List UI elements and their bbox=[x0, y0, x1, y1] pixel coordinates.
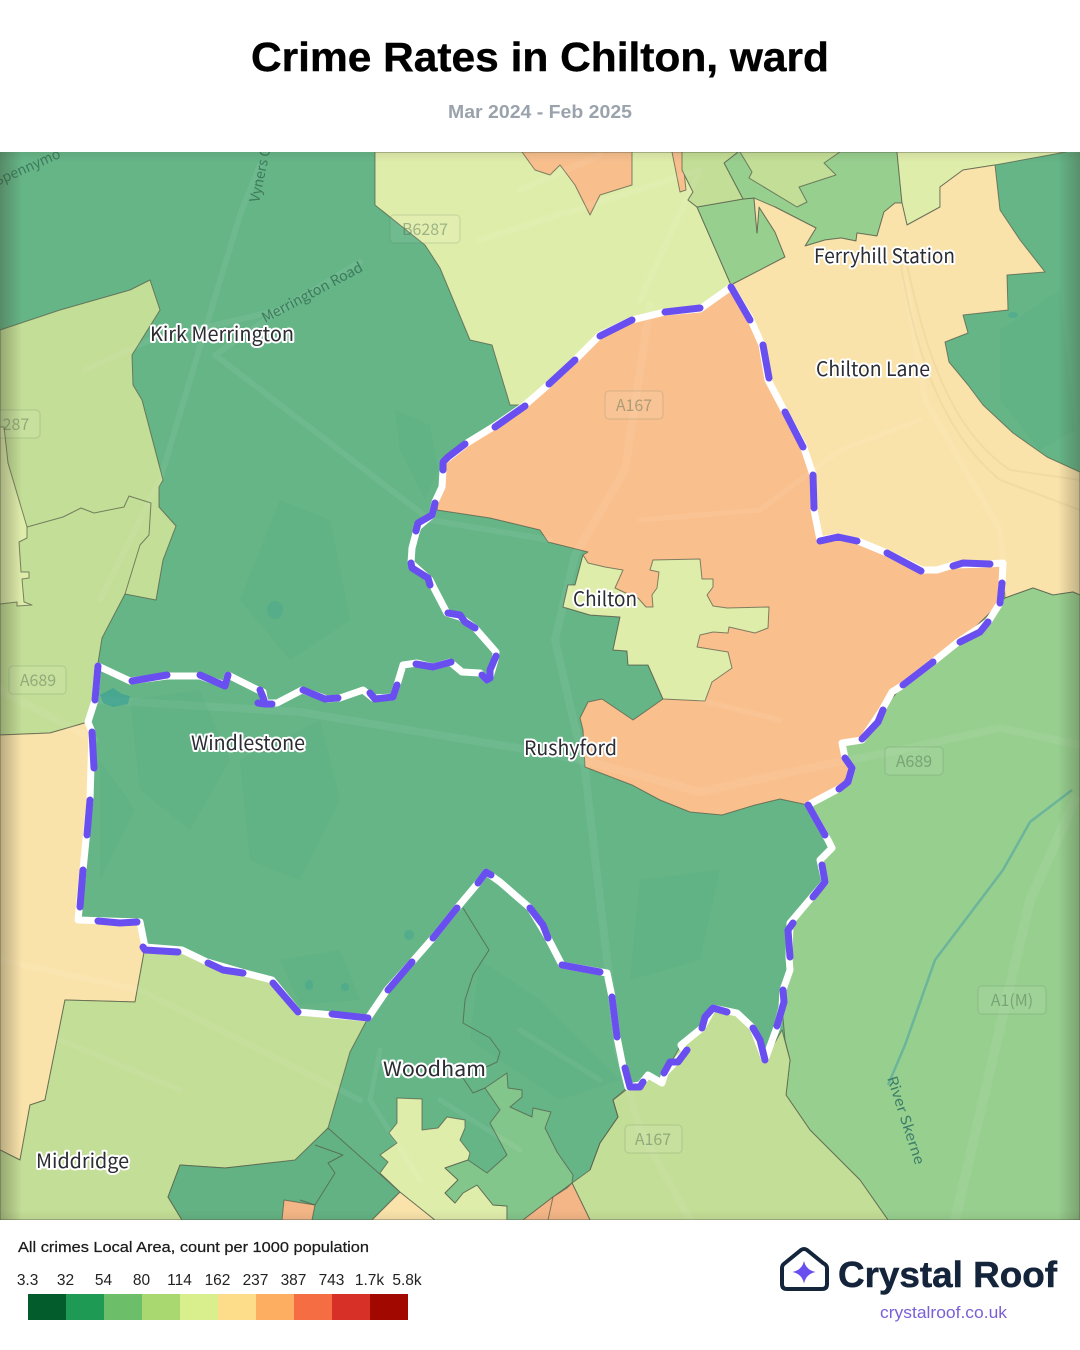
road label: B6287 bbox=[390, 215, 460, 243]
legend scale labels: 54 bbox=[95, 1272, 112, 1289]
region: Ferryhill yellow bbox=[731, 165, 1080, 598]
region: west light green bbox=[0, 280, 176, 735]
legend title: All crimes Local Area, count per 1000 population bbox=[18, 1239, 369, 1256]
region: far west strip bbox=[0, 427, 32, 606]
region: Woodham south yellow bbox=[372, 1192, 435, 1220]
logo: wordmark: Crystal Roof bbox=[838, 1254, 1058, 1295]
road label: A1(M) bbox=[978, 986, 1046, 1014]
place label: Kirk Merrington: Kirk Merrington bbox=[150, 318, 294, 347]
road label: A167 south: A167 bbox=[635, 1126, 671, 1150]
legend scale labels: 237 bbox=[243, 1272, 268, 1289]
road label: A689 east: A689 bbox=[896, 748, 932, 772]
region: north light band bbox=[375, 152, 731, 405]
street label: Merrington Road: Merrington Road bbox=[258, 257, 366, 327]
legend scale labels: 80 bbox=[133, 1272, 150, 1289]
region: Chilton orange bbox=[437, 285, 1003, 815]
place label: Middridge: Middridge bbox=[36, 1145, 129, 1174]
region: Chilton village pale bbox=[563, 555, 769, 701]
road label: B6287 clipped west: 287 bbox=[3, 411, 29, 435]
place label: Woodham: Woodham bbox=[383, 1053, 486, 1082]
legend scale labels: 3.3 bbox=[17, 1272, 38, 1289]
subtitle: date range: Mar 2024 - Feb 2025 bbox=[448, 102, 632, 122]
region: south-west yellow bbox=[0, 722, 145, 1160]
ward boundary: white casing bbox=[78, 287, 1003, 1087]
region: north-east mid green band bbox=[724, 152, 902, 246]
field shading bbox=[100, 290, 1075, 1100]
map edge vignette bbox=[0, 152, 1080, 1220]
region: Woodham pale yellow-green bbox=[380, 1098, 507, 1220]
road label: A1(M): A1(M) bbox=[991, 987, 1033, 1011]
road label: A167 north bbox=[605, 391, 663, 419]
roads bbox=[65, 152, 706, 1144]
legend scale labels: 387 bbox=[281, 1272, 306, 1289]
road label: A689 west: A689 bbox=[20, 667, 56, 691]
ward boundary: purple dashes bbox=[80, 287, 1002, 1087]
region: Woodham internal boundary bbox=[463, 908, 500, 1093]
legend scale labels: 1.7k bbox=[355, 1272, 384, 1289]
logo: house icon with star bbox=[782, 1249, 827, 1289]
place label: Ferryhill Station: Ferryhill Station bbox=[814, 240, 955, 269]
region: east pale green bbox=[782, 588, 1080, 1220]
road label: A689 west bbox=[9, 666, 66, 694]
region: south orange bbox=[523, 1183, 590, 1220]
choropleth map bbox=[0, 144, 1080, 1220]
region: Woodham pale green bbox=[445, 1073, 573, 1220]
legend scale labels: 114 bbox=[167, 1272, 192, 1289]
region: north light green 1 bbox=[682, 152, 743, 207]
road label: A167 north: A167 bbox=[616, 392, 652, 416]
region: small orange bbox=[282, 1200, 315, 1220]
website link text: crystalroof.co.uk bbox=[880, 1304, 1008, 1322]
road label: A689 east bbox=[885, 747, 943, 775]
railway bbox=[900, 264, 1066, 504]
river label: River Skerne: River Skerne bbox=[882, 1073, 930, 1167]
region: north pale green bbox=[697, 198, 785, 285]
legend colour bar bbox=[28, 1294, 408, 1320]
region: south pale green bbox=[572, 1008, 888, 1220]
river Skerne line bbox=[888, 790, 1072, 1085]
region: Woodham west small bbox=[168, 1128, 400, 1220]
region: north-east pale strip bbox=[897, 152, 1066, 225]
place label: Chilton Lane: Chilton Lane bbox=[816, 353, 930, 382]
place label: Windlestone: Windlestone bbox=[191, 727, 305, 756]
road label: B6287: B6287 bbox=[402, 216, 448, 240]
legend scale labels: 5.8k bbox=[392, 1272, 422, 1289]
road label: A167 south bbox=[625, 1125, 682, 1153]
road label: B6287 clipped west bbox=[0, 410, 40, 438]
region: north orange sliver bbox=[672, 152, 686, 192]
legend scale labels: 162 bbox=[205, 1272, 230, 1289]
legend scale labels bbox=[17, 1272, 422, 1289]
region: north light green 2 bbox=[740, 152, 840, 207]
place label: Chilton: Chilton bbox=[573, 583, 637, 612]
region: north orange patches bbox=[522, 152, 632, 215]
legend scale labels: 743 bbox=[319, 1272, 344, 1289]
region: south-west light green bbox=[0, 947, 368, 1220]
region: west internal boundary bbox=[27, 496, 151, 594]
water patches bbox=[100, 312, 1018, 991]
street label: Vyners: Vyners C bbox=[244, 146, 275, 204]
place label: Rushyford: Rushyford bbox=[524, 732, 617, 761]
legend scale labels: 32 bbox=[57, 1272, 74, 1289]
title: Crime Rates in Chilton, ward bbox=[251, 34, 829, 80]
